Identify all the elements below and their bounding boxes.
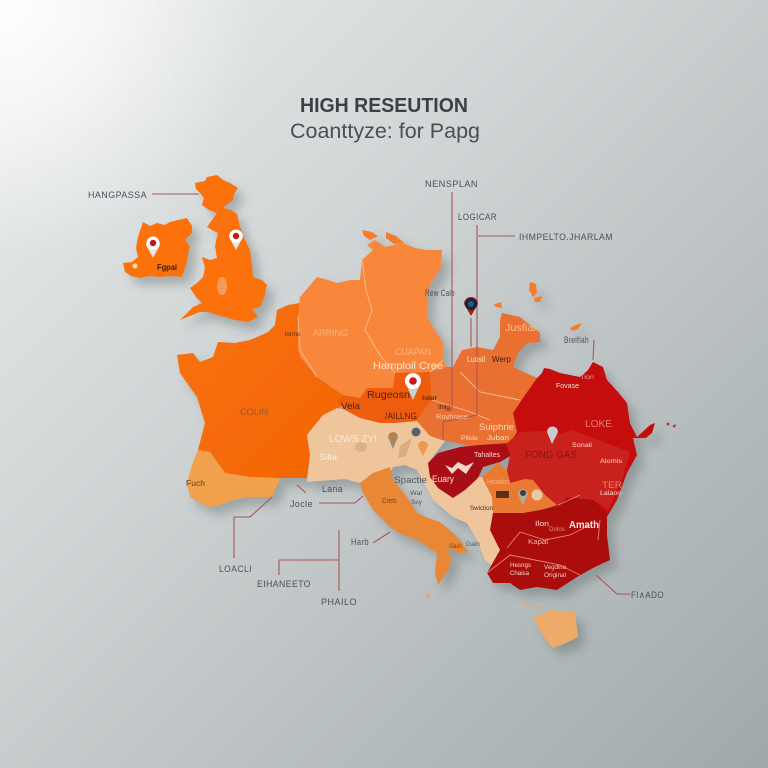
map labels: Pllide	[461, 435, 478, 442]
map labels: lorms	[285, 332, 300, 338]
callout labels: LOACLI	[219, 564, 252, 575]
map labels: Vela	[341, 401, 360, 411]
map labels: Kapal	[528, 539, 548, 546]
region: Germany	[298, 240, 447, 398]
map labels: Hesngs	[510, 563, 531, 569]
callout labels: NENSPLAN	[425, 179, 478, 190]
icon: pin small orange right	[418, 441, 428, 456]
title: HIGH RESEUTION	[300, 95, 468, 117]
map labels: Spactie	[394, 475, 427, 485]
region: Ireland	[123, 218, 192, 278]
map labels: /AILLNG	[385, 411, 417, 422]
map labels: Sonali	[572, 442, 592, 449]
map labels: Wal	[410, 490, 423, 497]
region: northern islands	[362, 230, 582, 331]
map labels: Hoxdon	[487, 479, 510, 486]
map labels: Chaisa	[510, 571, 530, 577]
icon: pin grey	[547, 426, 558, 444]
icon: pin centre	[405, 373, 421, 400]
callout labels: PHAILO	[321, 597, 357, 608]
region: Alps	[307, 408, 445, 483]
small islets	[426, 594, 540, 610]
map labels: LOKE	[585, 419, 612, 430]
map labels: Lalaon	[600, 490, 621, 497]
map labels: Amath	[569, 519, 599, 531]
region: Fong Gas red	[506, 430, 630, 510]
callout labels: IHMPELTO.JHARLAM	[519, 232, 613, 243]
map labels: Fgpai	[157, 262, 177, 272]
region: Orange pocket	[482, 463, 557, 513]
map labels: COLIN	[240, 407, 268, 417]
callout labels: Lana	[322, 484, 343, 495]
map labels: Swiction	[470, 506, 493, 512]
map labels: Slash	[449, 544, 462, 550]
map labels: Isler	[422, 395, 438, 402]
map labels: Dolos	[549, 526, 566, 533]
leader lines	[152, 192, 630, 594]
callout labels: FI∧ADO	[631, 590, 664, 601]
region: France	[177, 303, 345, 478]
map labels: Ilon	[535, 521, 549, 528]
map labels: Rovhrase	[436, 414, 468, 421]
callout labels: Rew Cale	[425, 288, 455, 299]
region: Great Britain	[180, 175, 267, 322]
map labels: Tion	[580, 374, 594, 381]
map labels: Original	[544, 573, 566, 579]
map labels: Vegdina	[544, 565, 567, 571]
icon: pin dark	[464, 297, 478, 316]
map labels: Silla	[319, 452, 337, 462]
title	[290, 95, 480, 143]
callout labels: Breifiah	[564, 335, 589, 346]
region: Balkans	[417, 463, 500, 567]
map	[123, 175, 655, 648]
callout labels: EIHANEETO	[257, 579, 311, 590]
region: Central band	[337, 372, 432, 423]
region: Upper red	[507, 362, 655, 517]
map labels: CUAPAN	[395, 347, 431, 357]
internal borders	[298, 260, 600, 575]
map labels: Gain	[466, 541, 480, 548]
callout labels: LOGICAR	[458, 212, 497, 223]
map labels	[157, 262, 623, 579]
map labels: Euary	[432, 474, 454, 484]
map labels: ARRING	[313, 328, 348, 338]
map labels: LOWS ZYI	[329, 433, 377, 445]
region: Lower dark red	[487, 497, 610, 590]
callout labels: HANGPASSA	[88, 190, 147, 201]
map labels: Fovase	[556, 383, 579, 390]
map labels: Ihilg	[438, 405, 450, 411]
map labels: TER	[602, 480, 623, 490]
callout labels	[88, 179, 664, 608]
map labels: Suiphrie	[479, 422, 514, 432]
icon: pin Britain	[229, 230, 243, 250]
icon: pin Ireland	[146, 236, 160, 258]
map labels: Luosil	[467, 354, 485, 364]
callout labels: Jocle	[290, 499, 313, 510]
map labels: Juban	[487, 435, 509, 442]
small red islets	[666, 422, 676, 428]
map labels: Cretc	[382, 498, 397, 505]
map labels: Tahaltes	[474, 452, 500, 459]
map labels: Fuch	[186, 478, 205, 488]
map labels: Alomis	[600, 458, 623, 465]
title: Coanttyze: for Papg	[290, 120, 480, 143]
map labels: Hamploil Cree	[373, 360, 443, 372]
map labels: Werp	[492, 355, 512, 364]
region: Poland	[417, 313, 540, 448]
region: Tasmania	[533, 610, 578, 648]
map labels: FONG GAS	[525, 450, 577, 461]
map labels: Sey	[411, 499, 423, 506]
icon: pin pocket	[518, 489, 542, 506]
region: Italy	[360, 467, 468, 585]
map labels: Jusfiar	[505, 323, 538, 334]
icon: pin small orange left	[388, 432, 398, 449]
region: Spain	[187, 450, 280, 507]
icon: pin grey circle	[412, 428, 420, 436]
callout labels: Harb	[351, 537, 369, 548]
map labels: Rugeosn	[367, 390, 410, 401]
icon: camera box	[496, 491, 509, 498]
map spots	[132, 264, 474, 474]
region: Hungary	[428, 443, 512, 498]
